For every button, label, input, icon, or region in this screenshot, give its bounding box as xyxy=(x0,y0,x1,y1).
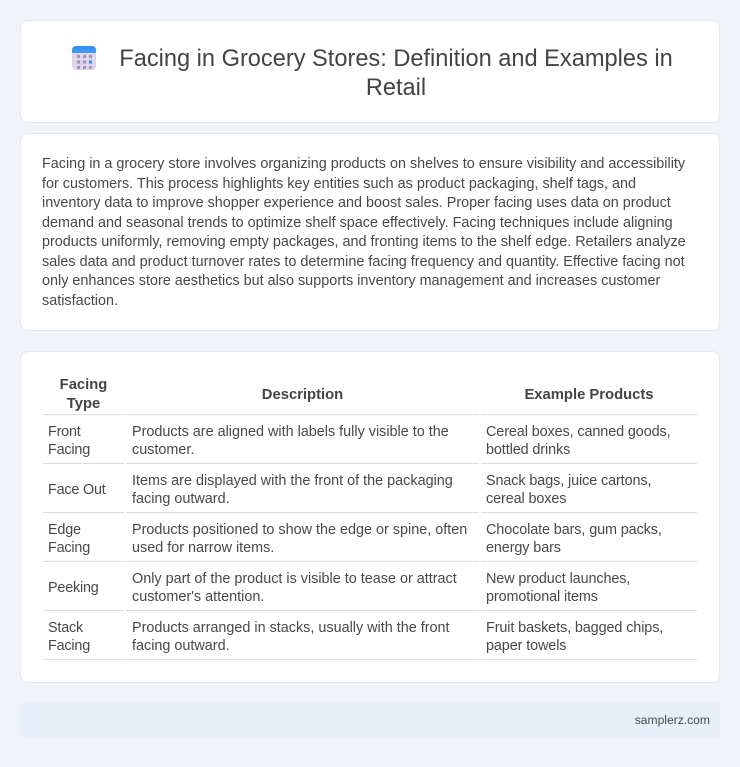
row: Stack Facing: paper towels xyxy=(486,638,566,654)
intro text panel xyxy=(20,133,720,331)
table header: Facing xyxy=(60,377,107,393)
table header xyxy=(43,377,697,415)
row: Edge Facing: Chocolate bars, gum packs, xyxy=(486,522,662,538)
intro paragraph: products uniformly, removing empty packages, and fronting items to the shelf edge. Retailers analyze xyxy=(42,234,686,250)
row: Face Out: Snack bags, juice cartons, xyxy=(486,473,651,489)
icon: calendar xyxy=(72,46,96,70)
row: Stack Facing: Products arranged in stacks, usually with the front xyxy=(132,620,450,636)
row: Face Out: facing outward. xyxy=(132,491,230,507)
row: Edge Facing xyxy=(43,522,697,562)
row: Front Facing: Front xyxy=(48,424,81,440)
row: Face Out: cereal boxes xyxy=(486,491,566,507)
row: Edge Facing: energy bars xyxy=(486,540,561,556)
intro paragraph: sales data and product turnover rates to determine facing frequency and quantity. Effective facing not xyxy=(42,254,685,270)
intro paragraph xyxy=(42,156,686,308)
row: Front Facing xyxy=(43,424,697,464)
table header: Example Products xyxy=(524,387,654,403)
footer text: samplerz.com xyxy=(635,713,710,727)
row: Front Facing: Facing xyxy=(48,442,90,458)
header panel xyxy=(20,20,720,123)
row: Edge Facing: Facing xyxy=(48,540,90,556)
intro paragraph: only enhances store aesthetics but also supports inventory management and increases customer xyxy=(42,273,660,289)
intro paragraph: demand and seasonal trends to optimize shelf space effectively. Facing techniques include aligning xyxy=(42,214,673,230)
row: Stack Facing: Stack xyxy=(48,620,83,636)
intro paragraph: inventory data to improve shopper experience and boost sales. Proper facing uses data on product xyxy=(42,195,671,211)
row: Front Facing: customer. xyxy=(132,442,194,458)
row: Peeking: promotional items xyxy=(486,589,598,605)
intro paragraph: satisfaction. xyxy=(42,292,118,308)
row: Edge Facing: Edge xyxy=(48,522,81,538)
row: Stack Facing: facing outward. xyxy=(132,638,230,654)
table header: Type xyxy=(67,396,100,412)
row: Face Out xyxy=(43,473,697,513)
row: Stack Facing xyxy=(43,620,697,660)
row: Stack Facing: Fruit baskets, bagged chips, xyxy=(486,620,663,636)
row: Edge Facing: used for narrow items. xyxy=(132,540,274,556)
row: Stack Facing: Facing xyxy=(48,638,90,654)
row: Peeking xyxy=(43,571,697,611)
footer bar xyxy=(20,703,720,737)
row: Face Out: Items are displayed with the front of the packaging xyxy=(132,473,453,489)
row: Peeking: Only part of the product is visible to tease or attract xyxy=(132,571,457,587)
table panel xyxy=(20,351,720,683)
row: Peeking: Peeking xyxy=(48,580,99,596)
row: Edge Facing: Products positioned to show the edge or spine, often xyxy=(132,522,467,538)
row: Face Out: Face Out xyxy=(48,482,106,498)
row: Peeking: customer's attention. xyxy=(132,589,264,605)
row: Front Facing: bottled drinks xyxy=(486,442,570,458)
row: Front Facing: Cereal boxes, canned goods, xyxy=(486,424,671,440)
intro paragraph: Facing in a grocery store involves organizing products on shelves to ensure visibility and accessibility xyxy=(42,156,685,172)
intro paragraph: for customers. This process highlights key entities such as product packaging, shelf tags, and xyxy=(42,176,636,192)
title: Facing in Grocery Stores: Definition and Examples in Retail xyxy=(119,46,673,101)
table header: Description xyxy=(262,387,343,403)
row: Peeking: New product launches, xyxy=(486,571,630,587)
row: Front Facing: Products are aligned with labels fully visible to the xyxy=(132,424,449,440)
